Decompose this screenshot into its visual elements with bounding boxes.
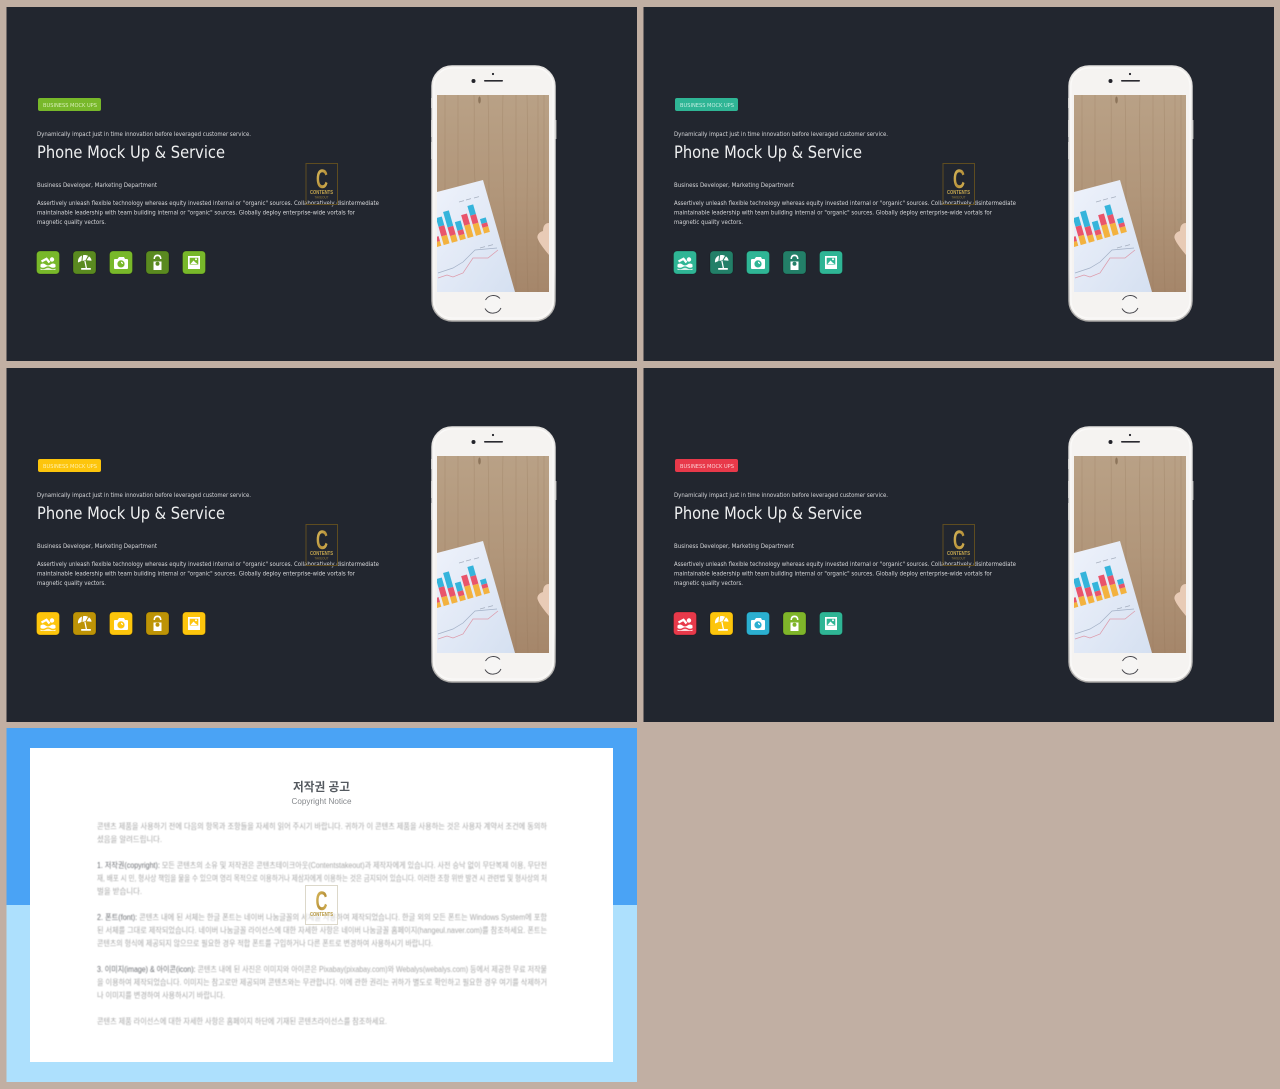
- logo watermark: C: [316, 886, 328, 916]
- logo watermark: C: [953, 525, 965, 555]
- logo watermark: C: [316, 164, 328, 194]
- phone mockup: [427, 66, 556, 321]
- logo watermark: [306, 524, 338, 566]
- title: Phone Mock Up & Service: [37, 504, 225, 523]
- logo watermark: [306, 886, 338, 924]
- title: Phone Mock Up & Service: [37, 143, 225, 162]
- logo watermark: TAKEOUT: [952, 556, 966, 560]
- body text: Assertively unleash flexible technology whereas equity invested internal or "organic" sources. Collaboratively disintermediate: [37, 201, 379, 207]
- body text: magnetic quality vectors.: [37, 220, 106, 226]
- icon: bag: [146, 612, 169, 635]
- icon: camera: [110, 612, 132, 635]
- icon: bag: [783, 251, 806, 274]
- intro line: Dynamically impact just in time innovation before leveraged customer service.: [674, 493, 888, 499]
- icon: swimmer: [36, 612, 60, 635]
- panel: slide 4 multicolour: [644, 368, 1274, 722]
- title: Phone Mock Up & Service: [674, 143, 862, 162]
- body text: maintainable leadership with team building internal or "organic" sources. Globally deploy enterprise-wide vortals for: [674, 210, 993, 216]
- notice body text: 콘텐츠의 형식에 제공되지 않으므로 필요한 경우 적합 폰트를 구입하거나 다른 폰트로 변경하여 사용하시기 바랍니다.: [97, 938, 433, 948]
- icon: swimmer: [674, 612, 696, 635]
- department: Business Developer, Marketing Department: [674, 183, 795, 189]
- logo watermark: CONTENTS: [310, 551, 333, 557]
- body text: [674, 201, 1016, 226]
- notice subheading: Copyright Notice: [292, 796, 352, 806]
- phone mockup: [427, 427, 556, 682]
- icon: beach umbrella: [73, 612, 96, 635]
- phone mockup: [1064, 66, 1194, 321]
- icon row: [36, 612, 206, 635]
- body text: maintainable leadership with team building internal or "organic" sources. Globally deploy enterprise-wide vortals for: [674, 571, 993, 577]
- badge: BUSINESS MOCK UPS: [43, 464, 97, 470]
- blue background top: [6, 728, 637, 905]
- icon: picture: [182, 251, 206, 274]
- notice body text: 콘텐츠 제품 라이선스에 대한 자세한 사항은 홈페이지 하단에 기재된 콘텐츠라이선스를 참조하세요.: [97, 1016, 387, 1026]
- logo watermark: CONTENTS: [947, 190, 970, 196]
- logo watermark: [306, 164, 338, 204]
- body text: magnetic quality vectors.: [37, 581, 106, 587]
- slide background: [644, 368, 1274, 722]
- intro line: Dynamically impact just in time innovation before leveraged customer service.: [674, 132, 888, 138]
- body text: Assertively unleash flexible technology whereas equity invested internal or "organic" sources. Collaboratively disintermediate: [37, 562, 379, 568]
- intro line: Dynamically impact just in time innovation before leveraged customer service.: [37, 493, 251, 499]
- panel: slide 2 teal: [644, 7, 1274, 361]
- intro line: Dynamically impact just in time innovation before leveraged customer service.: [37, 132, 251, 138]
- icon: picture: [182, 612, 206, 635]
- slide background: [6, 7, 637, 361]
- body text: magnetic quality vectors.: [674, 220, 743, 226]
- slide background: [6, 368, 637, 722]
- body text: [674, 562, 1016, 587]
- logo watermark: C: [953, 164, 965, 194]
- badge: BUSINESS MOCK UPS: [680, 464, 734, 470]
- notice body text: 된 서체를 그대로 제작되었습니다. 네이버 나눔글꼴 라이선스에 대한 자세한 사항은 네이버 나눔글꼴 홈페이지(hangeul.naver.com)를 참조하세요. 폰트는: [97, 925, 547, 935]
- white card: [30, 748, 613, 1062]
- title: Phone Mock Up & Service: [674, 504, 862, 523]
- badge: [38, 98, 101, 111]
- logo watermark: TAKEOUT: [314, 196, 329, 200]
- logo watermark: TAKEOUT: [952, 196, 966, 200]
- notice body text: 을 이용하여 제작되었습니다. 이미지는 참고로만 제공되며 콘텐츠와는 무관합니다. 이에 관한 권리는 귀하가 별도로 확인하고 필요한 경우 여기를 삭제하거: [97, 977, 547, 987]
- panel: copyright notice slide: [6, 728, 637, 1082]
- badge: BUSINESS MOCK UPS: [680, 103, 734, 109]
- logo watermark: CONTENTS: [310, 190, 333, 196]
- notice body text: 3. 이미지(image) & 아이콘(icon): 콘텐츠 내에 된 사진은 이미지와 아이콘은 Pixabay(pixabay.com)와 Webalys(webalys.com) 등에서 제공한 무료 저작물: [97, 964, 547, 974]
- notice body text: [97, 821, 548, 1026]
- panel: slide 3 yellow: [6, 368, 637, 722]
- icon row: [674, 251, 842, 274]
- notice body text: 재, 배포 시 민, 형사상 책임을 물을 수 있으며 영리 목적으로 이용하거나 제삼자에게 이용하는 것은 금지되어 있습니다. 이러한 조항 위반 발견 시 관련법 및 형사상의 처: [97, 873, 547, 883]
- badge: [675, 459, 738, 472]
- icon row: [674, 612, 842, 635]
- logo watermark: CONTENTS: [947, 551, 970, 557]
- logo watermark: CONTENTS: [310, 912, 333, 918]
- notice body text: 셨음을 알려드립니다.: [97, 834, 162, 844]
- icon: picture: [820, 612, 842, 635]
- logo watermark: [943, 164, 974, 204]
- logo watermark: [943, 524, 974, 566]
- icon: beach umbrella: [710, 251, 733, 274]
- notice body text: 2. 폰트(font): 콘텐츠 내에 된 서체는 한글 폰트는 네이버 나눔글꼴의 서체를 사용하여 제작되었습니다. 한글 외의 모든 폰트는 Windows System에 포함: [97, 912, 548, 922]
- notice heading: 저작권 공고: [293, 779, 350, 794]
- icon: beach umbrella: [710, 612, 733, 635]
- icon: swimmer: [36, 251, 60, 274]
- slide background: [644, 7, 1274, 361]
- department: Business Developer, Marketing Department: [37, 183, 158, 189]
- icon: beach umbrella: [73, 251, 96, 274]
- body text: Assertively unleash flexible technology whereas equity invested internal or "organic" sources. Collaboratively disintermediate: [674, 562, 1016, 568]
- badge: BUSINESS MOCK UPS: [43, 103, 97, 109]
- icon: picture: [820, 251, 842, 274]
- panel: slide 1 green: [6, 7, 637, 361]
- light blue background bottom: [6, 905, 637, 1082]
- notice body text: 벌을 받습니다.: [97, 886, 142, 896]
- body text: [37, 201, 379, 226]
- department: Business Developer, Marketing Department: [37, 544, 158, 550]
- phone mockup: [1064, 427, 1194, 682]
- logo watermark: TAKEOUT: [314, 556, 329, 560]
- icon: camera: [746, 612, 770, 635]
- body text: maintainable leadership with team building internal or "organic" sources. Globally deploy enterprise-wide vortals for: [37, 571, 356, 577]
- icon: swimmer: [674, 251, 696, 274]
- body text: magnetic quality vectors.: [674, 581, 743, 587]
- body text: [37, 562, 379, 587]
- notice body text: 나 이미지를 변경하여 사용하시기 바랍니다.: [97, 990, 225, 1000]
- badge: [38, 459, 101, 472]
- body text: maintainable leadership with team building internal or "organic" sources. Globally deploy enterprise-wide vortals for: [37, 210, 356, 216]
- notice body text: 콘텐츠 제품을 사용하기 전에 다음의 항목과 조항들을 자세히 읽어 주시기 바랍니다. 귀하가 이 콘텐츠 제품을 사용하는 것은 사용자 계약서 조건에 동의하: [97, 821, 548, 831]
- icon: camera: [110, 251, 132, 274]
- icon: camera: [746, 251, 770, 274]
- icon row: [36, 251, 206, 274]
- icon: bag: [783, 612, 806, 635]
- logo watermark: C: [316, 525, 328, 555]
- body text: Assertively unleash flexible technology whereas equity invested internal or "organic" sources. Collaboratively disintermediate: [674, 201, 1016, 207]
- notice body text: 1. 저작권(copyright): 모든 콘텐츠의 소유 및 저작권은 콘텐츠테이크아웃(Contentstakeout)과 제작자에게 있습니다. 사전 승낙 없이 무단복제 이용, 무단전: [97, 860, 547, 870]
- badge: [675, 98, 738, 111]
- icon: bag: [146, 251, 169, 274]
- department: Business Developer, Marketing Department: [674, 544, 795, 550]
